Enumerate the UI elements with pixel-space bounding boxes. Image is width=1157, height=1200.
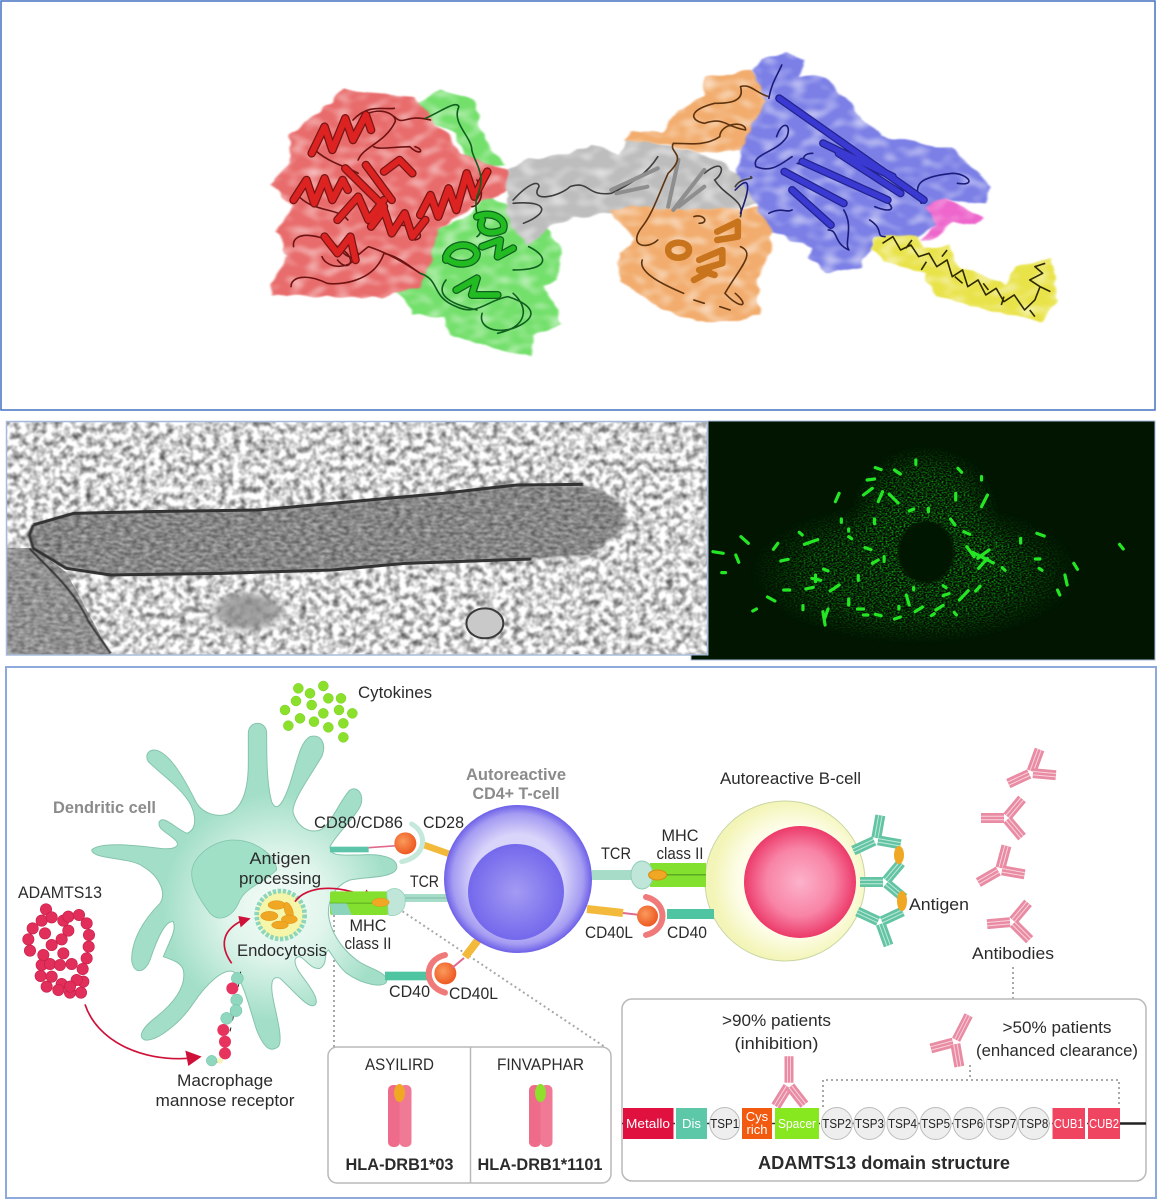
synapse: CD40L to CD40 right bbox=[587, 897, 714, 935]
label: enhanced clearance: (enhanced clearance) bbox=[976, 1041, 1138, 1060]
label: Antibodies: Antibodies bbox=[972, 944, 1054, 963]
sticks: yellow glycan bbox=[883, 237, 1050, 317]
panel: fluorescence microscopy of cell bbox=[691, 421, 1155, 660]
labels: cells and molecules bbox=[18, 683, 1054, 1110]
ribbon: orange domain bbox=[637, 86, 769, 310]
ribbon: green domain bbox=[420, 105, 543, 333]
label: TCR right: TCR bbox=[601, 844, 631, 863]
cytokines bbox=[280, 681, 357, 742]
domains: TSP2 to TSP8: TSP3 bbox=[855, 1116, 884, 1131]
domain: CUB2: CUB2 bbox=[1089, 1116, 1119, 1131]
ADAMTS13 chain bbox=[23, 904, 95, 998]
domains: TSP2 to TSP8: TSP8 bbox=[1019, 1116, 1048, 1131]
label: ASYILIRD: ASYILIRD bbox=[365, 1055, 434, 1074]
domains: TSP2 to TSP8: TSP4 bbox=[888, 1116, 917, 1131]
B-cell surface antibodies bbox=[851, 815, 907, 947]
domain: CUB1 bbox=[1052, 1108, 1085, 1139]
domain: Cys rich bbox=[742, 1108, 772, 1139]
panel: electron tomogram of tubular organelle bbox=[0, 421, 708, 660]
domain: Dis bbox=[676, 1108, 707, 1139]
label: CD40L right: CD40L bbox=[585, 923, 633, 942]
organelle: dark region lower left bbox=[7, 548, 110, 654]
domain: Metallo: Metallo bbox=[626, 1116, 670, 1131]
nucleus bbox=[192, 840, 277, 918]
domain: Spacer bbox=[775, 1108, 819, 1139]
label: class II left: class II bbox=[344, 934, 392, 953]
label: CD80/CD86: CD80/CD86 bbox=[314, 813, 403, 832]
icon: HLA-DRB1*1101 molecule bbox=[529, 1084, 552, 1147]
synapse: TCR to MHC right bbox=[592, 861, 706, 889]
nucleus bbox=[898, 521, 954, 583]
antibody: clearance bbox=[930, 1013, 973, 1067]
green puncta bbox=[713, 460, 1123, 625]
domains: TSP2 to TSP8 bbox=[821, 1108, 1049, 1140]
label: HLA-DRB1*1101: HLA-DRB1*1101 bbox=[478, 1155, 602, 1174]
domain: Cys rich: Cys bbox=[746, 1109, 769, 1124]
dotted connector lines bbox=[334, 903, 1119, 1107]
domain track bbox=[622, 1108, 1146, 1140]
surface: yellow glycan bbox=[870, 235, 1058, 321]
label: Autoreactive B-cell: Autoreactive B-cell bbox=[720, 769, 861, 788]
ribbon: gray domain bbox=[513, 157, 752, 223]
surface: pink patch bbox=[921, 198, 982, 241]
B-cell nucleus bbox=[744, 826, 856, 938]
gray blob bbox=[214, 593, 280, 630]
vesicle ring bbox=[466, 608, 503, 638]
label: over 50 percent: >50% patients bbox=[1002, 1018, 1112, 1037]
domain: Dis: Dis bbox=[682, 1116, 702, 1131]
domain: Metallo bbox=[623, 1108, 674, 1139]
arrow: ADAMTS13 to receptor bbox=[85, 1004, 202, 1066]
surface: blue spacer domain bbox=[736, 51, 990, 273]
panel: protein structure bbox=[1, 1, 1155, 410]
surface: green disintegrin domain bbox=[397, 90, 562, 357]
label: inhibition: (inhibition) bbox=[734, 1034, 818, 1053]
endosome bbox=[257, 891, 305, 939]
label: over 90 percent: >90% patients bbox=[722, 1011, 831, 1030]
arrow: antigen to MHC bbox=[295, 888, 373, 902]
domain: CUB1: CUB1 bbox=[1054, 1116, 1084, 1131]
antibody: inhibitory bbox=[772, 1056, 808, 1109]
label: Endocytosis: Endocytosis bbox=[237, 941, 327, 960]
label: MHC left: MHC bbox=[350, 916, 386, 935]
label: Autoreactive T-cell: Autoreactive bbox=[466, 765, 566, 784]
label: CD4+ T-cell: CD4+ T-cell bbox=[472, 784, 560, 803]
label: ADAMTS13: ADAMTS13 bbox=[18, 883, 102, 902]
label: HLA-DRB1*03: HLA-DRB1*03 bbox=[346, 1155, 454, 1174]
domain: TSP1: TSP1 bbox=[710, 1116, 739, 1131]
label: CD28: CD28 bbox=[423, 813, 464, 832]
dendritic cell group bbox=[23, 681, 456, 1066]
free antibodies bbox=[976, 748, 1056, 943]
synapse stalk to T-cell bbox=[452, 940, 478, 968]
icon: HLA-DRB1*03 molecule bbox=[388, 1084, 412, 1147]
label: TCR left: TCR bbox=[410, 872, 439, 891]
label: CD40 lower: CD40 bbox=[389, 982, 430, 1001]
label: CD40 right: CD40 bbox=[667, 923, 707, 942]
label: FINVAPHAR: FINVAPHAR bbox=[497, 1055, 584, 1074]
domains: TSP2 to TSP8: TSP5 bbox=[921, 1116, 950, 1131]
label: CD40L lower: CD40L bbox=[449, 984, 498, 1003]
mannose receptor chain bbox=[206, 972, 243, 1066]
surface: orange cysteine-rich domain bbox=[610, 69, 772, 322]
box: ADAMTS13 domain structure bbox=[622, 999, 1146, 1181]
label: mannose receptor: mannose receptor bbox=[156, 1091, 295, 1110]
domain: CUB2 bbox=[1088, 1108, 1120, 1139]
domain: Spacer: Spacer bbox=[778, 1116, 817, 1131]
box: HLA alleles bbox=[328, 1047, 611, 1183]
ribbon: blue domain bbox=[735, 65, 969, 250]
dendritic cell body bbox=[92, 723, 397, 1049]
diffuse cytoplasm glow bbox=[750, 445, 1080, 644]
CD80/CD86 to CD28 synapse bbox=[330, 824, 453, 862]
ribbon: red domain bbox=[291, 108, 487, 287]
label: Macrophage: Macrophage bbox=[177, 1071, 273, 1090]
domains: TSP2 to TSP8: TSP2 bbox=[822, 1116, 851, 1131]
label: Cytokines: Cytokines bbox=[358, 683, 432, 702]
label: class II right: class II bbox=[656, 844, 704, 863]
title: ADAMTS13 domain structure: ADAMTS13 domain structure bbox=[758, 1153, 1010, 1173]
label: MHC right: MHC bbox=[662, 826, 698, 845]
arrow: endocytosis bbox=[224, 916, 251, 963]
MHC class II to TCR synapse left bbox=[330, 888, 453, 916]
surface: gray TSP domain bbox=[507, 139, 761, 245]
organelle: membrane and details bbox=[30, 484, 583, 653]
domains: TSP2 to TSP8: TSP6 bbox=[954, 1116, 983, 1131]
domains: TSP2 to TSP8: TSP7 bbox=[987, 1116, 1016, 1131]
organelle: tube body bbox=[28, 485, 630, 574]
label: Antigen: Antigen bbox=[909, 895, 969, 914]
label: Antigen processing: Antigen bbox=[250, 849, 310, 868]
T-cell nucleus bbox=[468, 844, 564, 940]
label: Dendritic cell: Dendritic cell bbox=[53, 798, 156, 817]
label: processing: processing bbox=[239, 869, 321, 888]
panel: autoimmune pathway bbox=[6, 667, 1156, 1198]
domain: Cys rich: rich bbox=[747, 1122, 767, 1137]
T-cell bbox=[444, 805, 592, 953]
B-cell bbox=[705, 801, 865, 961]
domain: TSP1 bbox=[710, 1108, 740, 1140]
CD40 to CD40L synapse lower bbox=[385, 955, 456, 993]
protein: ADAMTS13 surface and ribbons bbox=[270, 51, 1058, 357]
surface: red metalloprotease domain bbox=[270, 90, 511, 298]
